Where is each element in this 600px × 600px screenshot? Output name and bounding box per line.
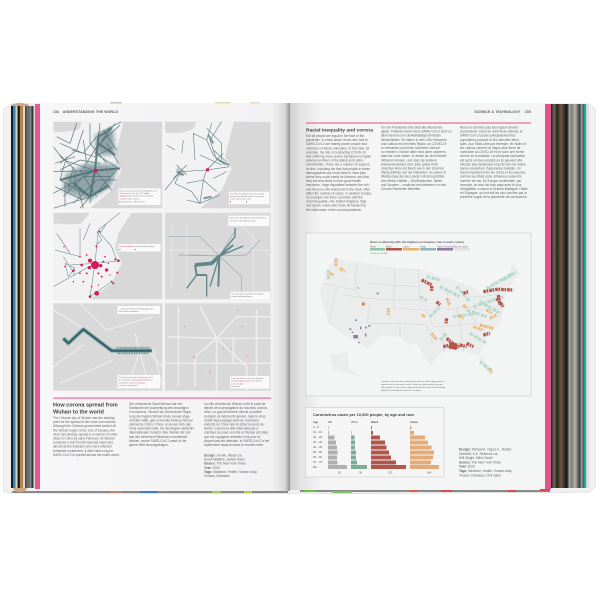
bars: latino: 184	[427, 470, 432, 474]
age labels: 70 – 79	[313, 460, 322, 464]
map legend: Native American	[437, 246, 455, 248]
left page	[40, 103, 290, 491]
left heading: How corona spread from	[53, 402, 118, 408]
panel: route tracing map	[53, 303, 162, 391]
map legend	[370, 246, 470, 255]
right french text block: populations pauvres et les minorités ethni-	[460, 138, 520, 142]
callout: virtually had already begun	[231, 295, 252, 298]
left page header: 154 UNDERSTANDING THE WORLD	[53, 110, 118, 114]
right german text block: häufig Einfluss auf die Fallzahlen. So waren in	[381, 171, 446, 175]
panel: outbreaks map	[53, 213, 162, 299]
right french text block: comme aux États-Unis, influence souvent le	[460, 174, 522, 179]
callout: By 22 January, officials acknowledged the risk	[119, 189, 157, 192]
left english text block: The Chinese city of Wuhan was the starting	[53, 416, 115, 420]
age labels: 40 – 49	[313, 445, 322, 449]
map legend: Latino	[403, 246, 410, 248]
map footnote: with at least 10 cases. Data collected by The New York Times through	[381, 386, 446, 389]
bars: white	[351, 420, 367, 474]
right english text block: most inequality—the United Kingdom, Italy	[306, 200, 366, 204]
right credits: Gebeloff, K.K. Rebecca Lai,	[459, 452, 498, 456]
bars: latino: Latino	[410, 420, 418, 424]
left credits: Year:	[204, 466, 212, 470]
right english text block: members of ethnic minorities. In the USA, for	[306, 146, 370, 150]
bars: all: 81	[338, 470, 341, 474]
right french text block: fossé important entre les riches et les pauvres,	[460, 171, 526, 175]
map legend: Black	[386, 246, 393, 248]
callout	[229, 192, 269, 204]
right english text block: and Spain—were also those hit hardest by	[306, 204, 366, 208]
callout: Trips on Jan. 1	[136, 202, 146, 204]
callout	[117, 306, 160, 314]
left page pink rule	[53, 398, 271, 399]
map footnote: May 2020, with data for most U.S. counties.	[381, 389, 422, 392]
callout: That's when the travel restrictions started	[119, 376, 153, 379]
left credits: Source:	[204, 462, 216, 466]
left french text block: plupart pas été détectés, le SARS-CoV-2 s'est	[204, 439, 269, 443]
callout: to hit Shanghai, with smaller spread than	[119, 379, 152, 382]
callout	[117, 375, 160, 388]
right german text block: dass sie Jobs haben, in denen sie sich leichter	[381, 154, 448, 158]
right credits: 2020	[467, 465, 475, 469]
right english text block: where they could easily be infected, and that	[306, 175, 369, 179]
left english text block: the Wuhan region at the end of January, the	[53, 428, 115, 432]
callout: As new outbreaks were already spreading	[119, 245, 154, 248]
age labels: Age	[313, 420, 319, 424]
map panels, drawn on a 3x grid	[53, 122, 271, 299]
left french text block: endroits en Chine dès le début du mois de	[204, 422, 264, 426]
left german text block: ganze Welt hinausgetragen.	[129, 443, 169, 447]
right page	[290, 103, 545, 490]
panel: US county map	[306, 233, 531, 396]
map footnote: highest rate of coronavirus cases. Rates are shown only for groups	[381, 383, 443, 386]
age labels: 80+	[313, 465, 318, 469]
right french text block: Nous ne sommes pas tous égaux devant	[460, 126, 518, 130]
left french text block: départ de la propagation du nouveau corona-	[204, 406, 268, 410]
left french text block: que les voyageurs infectés n'ont pour la	[204, 435, 260, 439]
callout	[230, 292, 270, 299]
callout: new international cases were reported	[231, 380, 261, 383]
map legend: Too few data	[454, 246, 468, 248]
right french text block: nombre de cas. En Europe occidentale, par	[460, 179, 522, 183]
panel: world travel network	[165, 213, 271, 299]
right french text block: les Latinos courent un risque plus élevé de	[460, 146, 521, 150]
map title: Race or ethnicity with the highest coronavirus rate in each county	[370, 240, 464, 244]
callout: across China's major cities	[230, 198, 251, 201]
left english text block: almost all the travelers who were infected	[53, 445, 112, 449]
bars: latino	[410, 420, 439, 474]
left french text block: rapidement répandu dans le monde entier.	[204, 443, 264, 447]
right english text block: pandemic. In many areas, those who had to	[306, 138, 368, 142]
left english text block: Although the Chinese government sealed off	[53, 424, 116, 428]
chart title: Coronavirus cases per 10,000 people, by age and race	[313, 412, 415, 417]
right english text block: example, the risk of contracting COVID-19	[306, 150, 366, 154]
right english text block: communities. There are a number of reasons	[306, 163, 370, 167]
left credits: 2020	[212, 466, 220, 470]
panel: pale network map	[165, 303, 271, 391]
callout: Outbreak on Jan. 1	[121, 201, 134, 204]
top edge colour flecks	[110, 102, 550, 493]
county clusters: latino	[330, 258, 497, 373]
right french text block: contracter la COVID-19 et de subir une forme	[460, 150, 524, 154]
right german text block: zu erkranken und einen schweren Verlauf	[381, 146, 440, 150]
callout: It was then the outbound travel was halted,	[230, 192, 264, 195]
panel: reduced trips map	[165, 122, 271, 208]
right french text block: exemple, ce sont les trois pays avec le plus	[460, 183, 522, 187]
county clusters: white	[328, 270, 517, 370]
right german text block: Arm-Reich-Gefälle – Großbritannien, Italien	[381, 179, 443, 183]
bars: all: All	[328, 420, 332, 424]
callout: of transmission: on Jan. 23, 7 million	[119, 192, 149, 195]
left heading: Wuhan to the world	[53, 410, 104, 416]
left french text block: s'était déjà propagé dans de nombreux	[204, 418, 259, 422]
book cover and shadow	[3, 103, 596, 494]
age labels: 60 – 69	[313, 455, 322, 459]
right french text block: SARS-CoV-2 touche principalement les	[460, 134, 516, 138]
age labels: 50 – 59	[313, 450, 322, 454]
right french text block: ques. Aux États-Unis par exemple, les Noirs et	[460, 141, 526, 146]
callout: across the globe	[231, 382, 244, 385]
right french text block: d'inégalités, à savoir la Grande-Bretagne, l'Italie	[460, 187, 528, 191]
right german text block: gleich. Patienten beim Virus SARS-CoV-2 sind vor	[381, 130, 453, 134]
right english text block: insurance. Huge disparities between the rich	[306, 183, 369, 187]
right french text block: sévère de la maladie. La principale explication	[460, 154, 525, 158]
left german text block: Die chinesische Stadt Wuhan war der	[129, 402, 183, 406]
right english text block: the initial wave of the corona pandemic.	[306, 208, 362, 212]
right german text block: Corona-Pandemie betroffen.	[381, 187, 421, 191]
right english text block: among members of the Black and Latino	[306, 159, 363, 163]
right german text block: infizieren können, und dass sie seltener	[381, 158, 438, 162]
bars: black: 102	[388, 470, 393, 474]
left german text block: Virus verbreitet hatte. Da die Region weiterhin	[129, 427, 194, 431]
right credits: Medicine, Health, Human body,	[467, 469, 512, 473]
US map shape	[320, 258, 520, 375]
callout: but most trips had left and the virus spread	[230, 195, 264, 198]
age labels: 20 – 29	[313, 435, 322, 439]
age labels: 10 – 19	[313, 430, 322, 434]
left credits: Jin Wu, Weiyi Cai,	[216, 454, 242, 458]
right french text block: première vague de la pandémie de coronavirus.	[460, 195, 528, 199]
left english text block: remained a hub for international travel and	[53, 441, 113, 445]
left english text block: remained undetected, it didn't take long for	[53, 449, 114, 453]
right german text block: zwischen Arm und Reich wie in den USA hat	[381, 166, 444, 170]
callout: and Wuhan's travel to Shanghai	[119, 381, 146, 384]
left german text block: zahlreiche Orte in China, an denen sich das	[129, 422, 191, 426]
callout: Two weeks later, travel from the outbreak	[231, 292, 264, 295]
right credits: Will Wright, Mitch Smith	[459, 456, 493, 460]
left german text block: schottet hatte, gab es bereits Anfang Februar	[129, 418, 194, 422]
right german text block: zu erleiden. Gründe dafür sind unter anderem,	[381, 150, 446, 154]
right german text block: allem ärmere und dunkelhäutige ethnische	[381, 134, 441, 138]
right english text block: SARS-CoV-2 are mainly poorer people and	[306, 142, 367, 146]
right credits: The New York Times	[471, 460, 501, 464]
right english text block: for example, the three countries with the	[306, 196, 363, 200]
age labels: 0 – 9	[313, 425, 319, 429]
callout: reached in early March	[119, 385, 138, 387]
left french text block: La ville chinoise de Wuhan a été le point de	[204, 402, 266, 406]
right french text block: bonne couverture d'assurance maladie. Un	[460, 166, 521, 170]
callout	[228, 216, 269, 226]
right french text block: infectés plus facilement et qu'ils ont une moins	[460, 162, 526, 166]
map legend: Asian	[420, 246, 427, 248]
map legend: White	[370, 246, 377, 248]
right english text block: affect the number of cases. In western Europe,	[306, 191, 372, 195]
left french text block: février. Comme la ville internationale a	[204, 427, 258, 431]
county clusters: native american	[349, 287, 379, 343]
left german text block: Coronavirus. Obwohl die chinesische Regie-	[129, 410, 192, 414]
route streak	[63, 329, 152, 353]
callout: and other cities in China	[119, 197, 140, 200]
right page stack edges	[551, 104, 589, 488]
bars: white: 38	[359, 470, 362, 474]
left french text block: virus. Le gouvernement chinois a confiné	[204, 410, 262, 414]
bars: black	[371, 420, 406, 474]
right pink edge strip	[545, 104, 551, 489]
right english text block: and suffering more severe symptoms is higher	[306, 154, 372, 158]
Alaska and Hawaii	[330, 352, 385, 378]
right credits: Richard A. Oppel Jr., Robert	[471, 448, 511, 452]
left credits: Design:	[204, 454, 216, 458]
map footnote: Counties in the map are shaded by the racial or ethnic group with the	[381, 380, 445, 383]
right french text block: la pandémie. Dans de nombreux endroits, le	[460, 130, 523, 134]
right french text block: est qu'ils ont des emplois où ils peuvent être	[460, 158, 523, 162]
right english text block: demographics are more likely to have jobs	[306, 171, 366, 175]
orange spot	[362, 302, 365, 306]
left french text block: la région de Wuhan fin janvier, mais le virus	[204, 414, 266, 418]
right french text block: et l'Espagne, qui ont été les plus touchés par la	[460, 191, 527, 195]
right german text block: Westeuropa die drei Länder mit dem größten	[381, 175, 445, 179]
bars: white: White	[351, 420, 358, 424]
right heading: Racial inequality and corona	[306, 128, 373, 134]
right english text block: for this, including the fact that people in these	[306, 167, 370, 171]
right credits: Year:	[459, 465, 467, 469]
right german text block: und Spanien – zunächst am härtesten von der	[381, 183, 447, 187]
left german text block: rung die Region Wuhan Ende Januar abge-	[129, 414, 190, 418]
left credits: Derek Watkins, James Glanz	[204, 458, 245, 462]
callout: New cases	[231, 386, 240, 388]
callout	[118, 188, 161, 205]
left french text block: continué de jouer son rôle et Wuhan est plate	[204, 431, 268, 435]
left credits: The New York Times	[216, 462, 246, 466]
left credits: Medicine, Health, Human body,	[212, 470, 257, 474]
callout: In the end, Chinese cities shut down and	[231, 377, 263, 380]
left german text block: blieben, wurde SARS-CoV-2 rasch in die	[129, 439, 187, 443]
county clusters: black	[422, 280, 513, 347]
bars: all	[328, 420, 347, 474]
right german text block: krankenversichert sind. Eine große Kluft	[381, 162, 438, 166]
right german text block: und Latinos ein erhöhtes Risiko, an COVID-19	[381, 142, 447, 146]
callout: and China to the world increased	[229, 219, 255, 222]
right english text block: Not all people are equal in the face of the	[306, 134, 364, 138]
right page header: SCIENCE & TECHNOLOGY 155	[474, 110, 531, 114]
age labels: 30 – 39	[313, 440, 322, 444]
left english text block: SARS-CoV-2 to spread across the entire world.	[53, 453, 120, 457]
panel: all trips map	[53, 122, 162, 208]
left german text block: Startpunkt der Ausbreitung des neuartigen	[129, 406, 189, 410]
right english text block: they are less likely to have good health	[306, 179, 361, 183]
right credits: Source:	[459, 460, 471, 464]
right credits: Viruses, Diseases, Civil rights	[459, 473, 501, 477]
callout: with smaller contribution	[119, 310, 139, 313]
callout	[230, 376, 269, 389]
callout: In the weeks that followed, travel out of Wuhan	[229, 217, 266, 220]
bars: black: Black	[371, 420, 379, 424]
right page pink rule	[306, 122, 531, 124]
left german text block: internationaler Verkehr über Wuhan lief und	[129, 431, 191, 435]
right credits: Tags:	[459, 469, 467, 473]
right english text block: and the poor, like that found in the USA, often	[306, 187, 371, 191]
right german text block: Vor der Pandemie sind nicht alle Menschen	[381, 126, 443, 130]
right german text block: Minderheiten. So haben in den USA Schwarze	[381, 138, 447, 142]
left pink edge strip	[35, 104, 40, 489]
callout: ... and so did the travel into Shanghai , but	[119, 307, 153, 310]
map legend: Cases per 10,000	[370, 252, 388, 255]
callout: outbound trips already made from Wuhan	[119, 195, 154, 198]
left english text block: point for the spread of the novel coronavirus.	[53, 420, 116, 424]
panel: bar chart by age and race	[306, 408, 444, 477]
left credits: Tags:	[204, 470, 212, 474]
left english text block: virus had already spread to a number of other	[53, 432, 118, 436]
right credits: Design:	[459, 448, 471, 452]
left english text block: cities in China by early February. As Wuhan	[53, 436, 115, 440]
left credits: Viruses, Diseases	[204, 474, 230, 478]
left page stack edges	[11, 106, 35, 488]
left german text block: fast alle infizierten Reisenden unentdeckt	[129, 435, 187, 439]
state borders	[323, 263, 500, 352]
